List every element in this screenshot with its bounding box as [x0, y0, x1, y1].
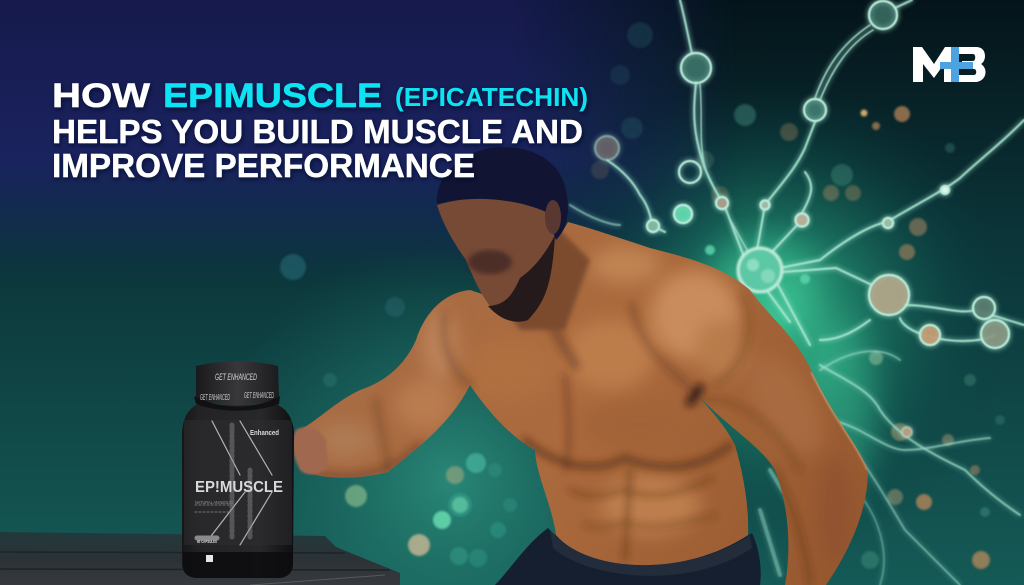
bottle brand small: Enhanced [250, 428, 279, 437]
logo: M+B [913, 47, 986, 82]
neuron cell body [738, 248, 782, 292]
bottle cap: GET ENHANCED [244, 391, 274, 400]
hand [293, 427, 328, 474]
bokeh particles [280, 22, 1005, 569]
neck [500, 230, 590, 330]
neuron nodes [595, 1, 1009, 437]
head [437, 147, 568, 322]
title parenthetical: (EPICATECHIN) [395, 82, 588, 112]
muscle highlights [315, 247, 853, 565]
bottle descriptor: NATURAL ANABOLIC [195, 500, 234, 505]
title line 1: HOW [52, 77, 151, 115]
man: athlete figure [293, 147, 868, 585]
torso and arms [296, 222, 868, 585]
muscle shadows [300, 270, 810, 585]
navy overlay behind title [0, 0, 699, 254]
title line 3: IMPROVE PERFORMANCE [52, 147, 475, 184]
title [52, 77, 588, 184]
table [0, 532, 400, 585]
bottle cap: GET ENHANCED [215, 372, 257, 382]
bottle capsule count: 60 CAPSULES [197, 539, 217, 544]
bottle product name: EP!MUSCLE [195, 479, 283, 496]
neuron dendrites [570, 0, 1024, 585]
neuron glow halo [710, 240, 875, 500]
title highlight: EPIMUSCLE [163, 77, 382, 115]
bottle label graphics [183, 420, 293, 578]
product bottle [182, 362, 294, 578]
bottle cap [194, 362, 280, 411]
bottle body [182, 405, 294, 578]
title line 2: HELPS YOU BUILD MUSCLE AND [52, 113, 583, 150]
shorts [495, 528, 761, 585]
bottle cap: GET ENHANCED [200, 393, 230, 402]
illustration: neuron network [570, 0, 1024, 585]
arm rim light [812, 372, 868, 470]
muscle shading [300, 247, 868, 585]
